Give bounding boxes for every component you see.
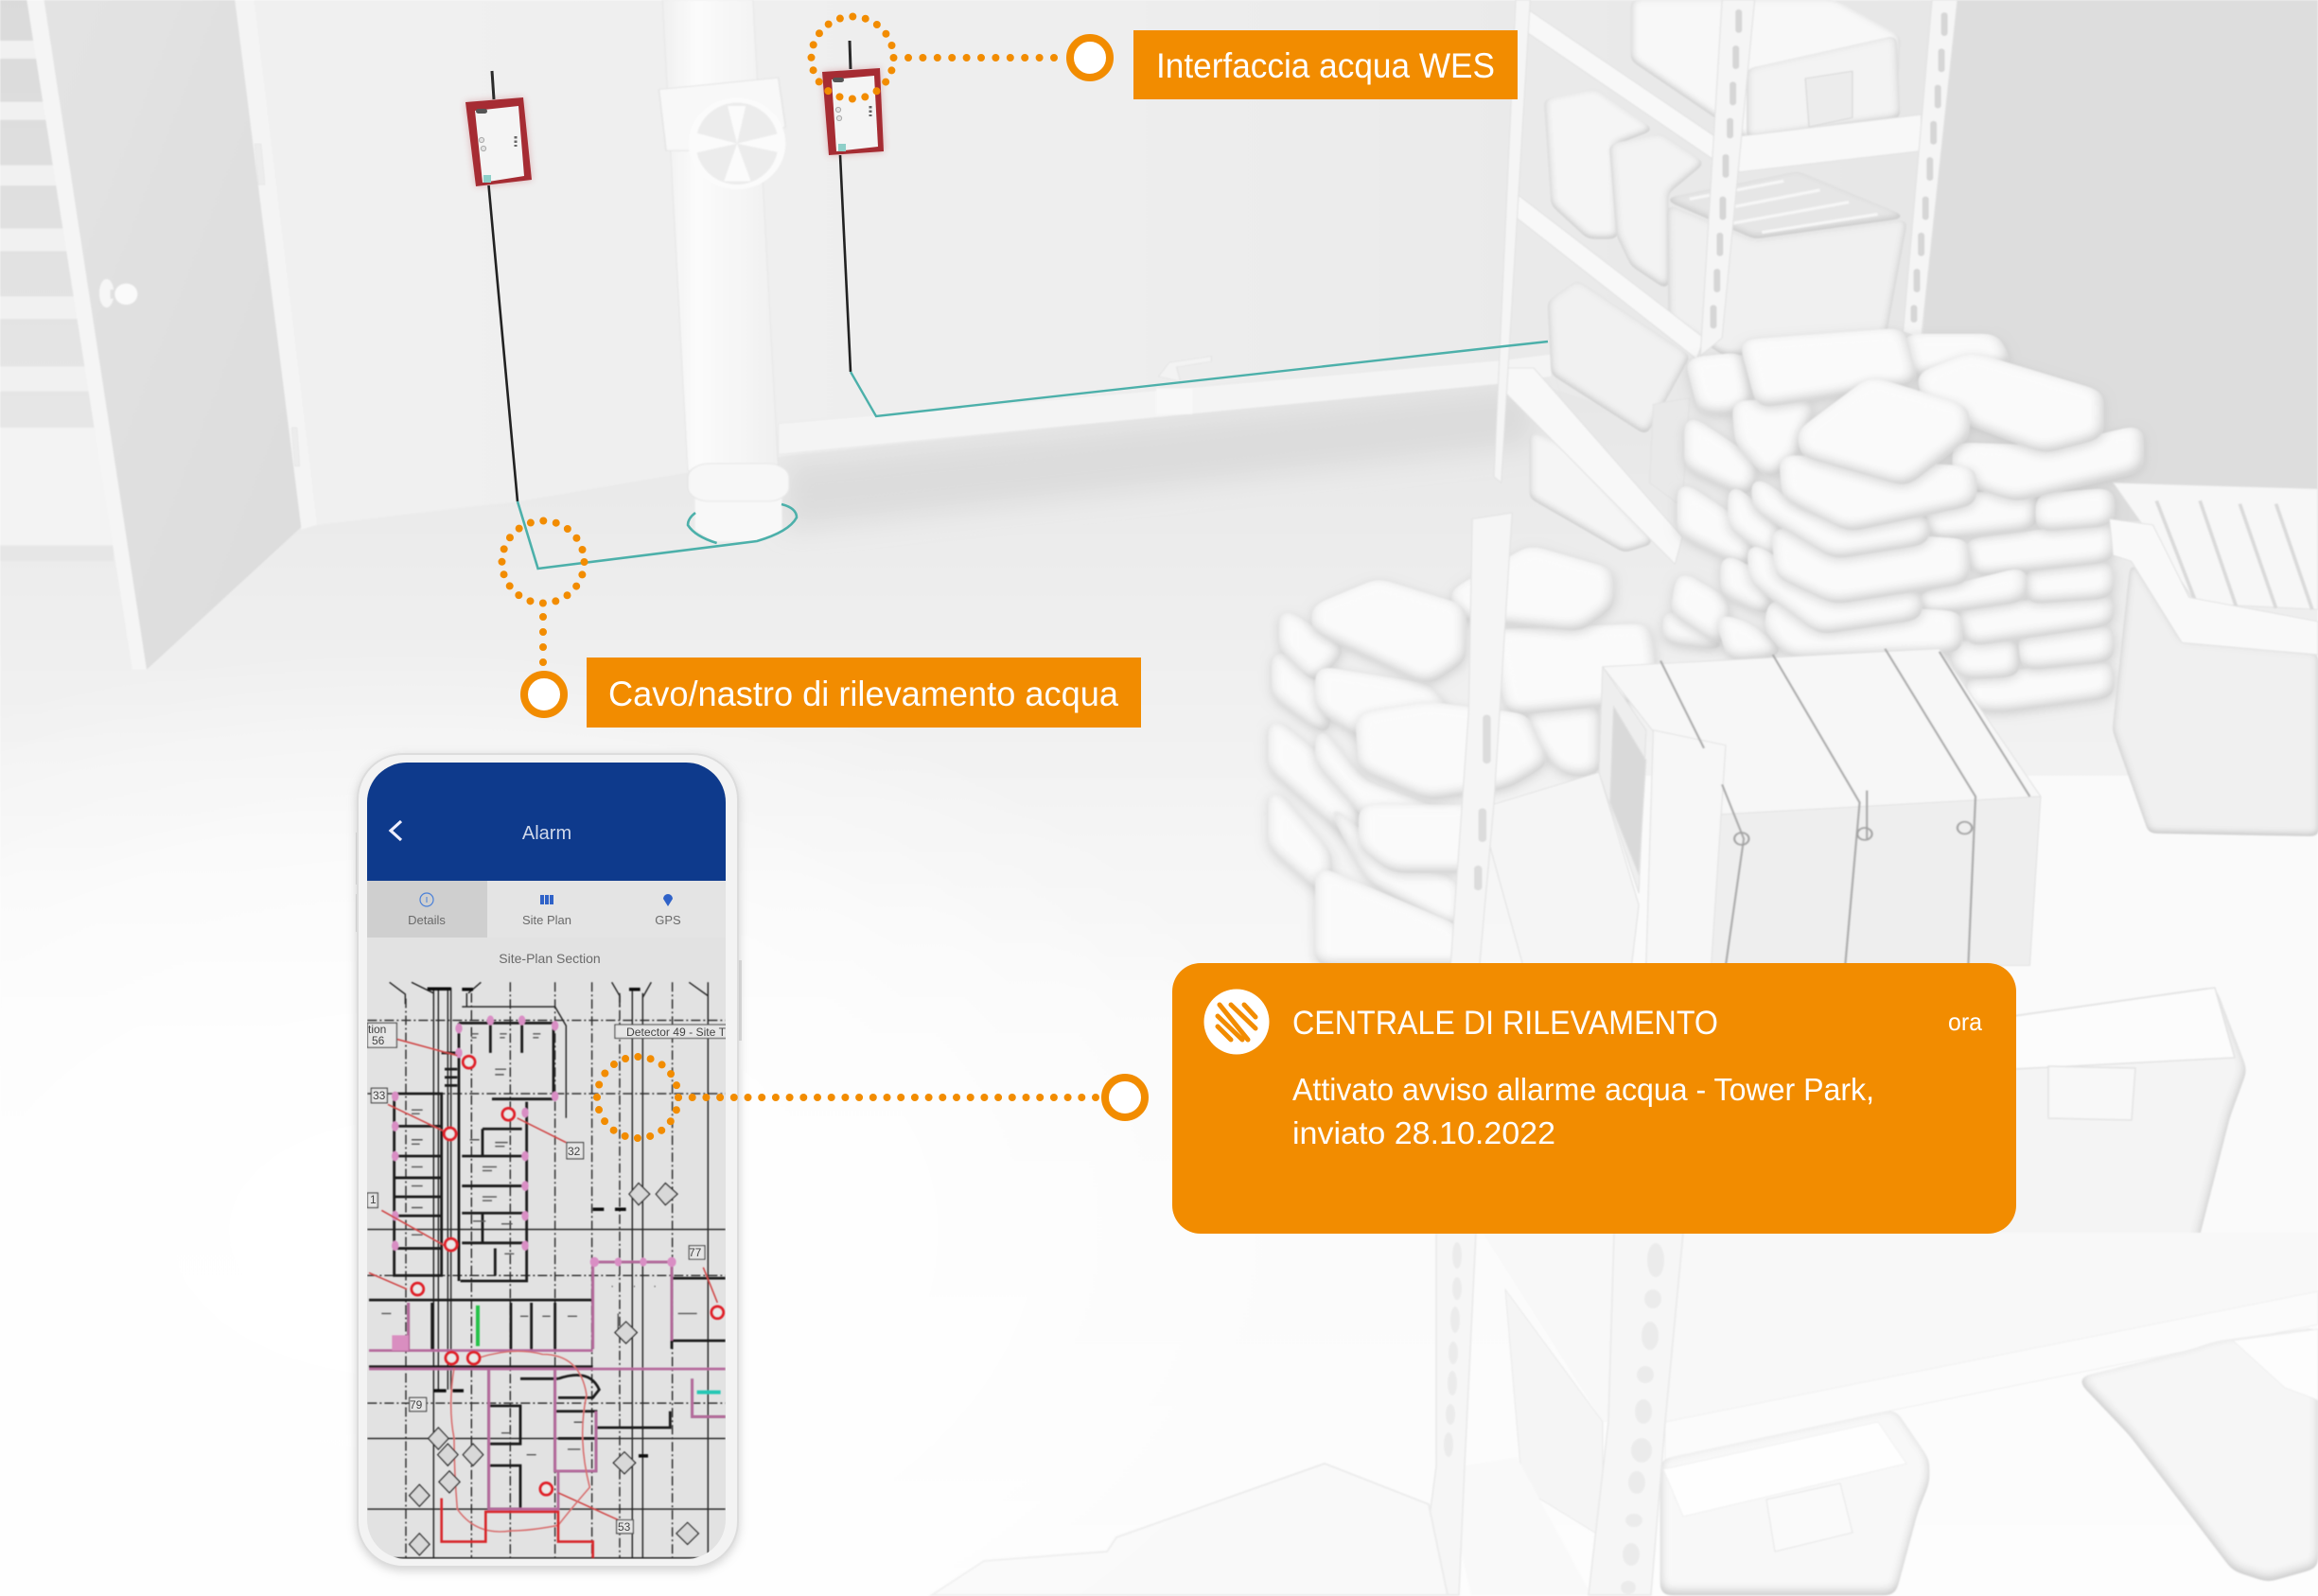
dotted connector (678, 1094, 1103, 1101)
dotted ring around cable (501, 520, 585, 604)
red glow (465, 97, 532, 186)
right storage box (2110, 482, 2318, 835)
phone side buttons (356, 833, 742, 1041)
label (1133, 30, 1518, 99)
tab bar (367, 881, 681, 938)
lower left bin (1505, 1289, 1603, 1537)
plan labels: 77 (689, 1246, 702, 1259)
icon: detection logo (1203, 990, 1270, 1054)
label (587, 658, 1141, 728)
label text: Interfaccia acqua WES (1156, 46, 1495, 85)
callout: phone to notification (597, 1057, 1145, 1138)
plan labels: tion (368, 1023, 386, 1036)
floor plan (367, 982, 727, 1558)
lower centre box (1660, 1410, 1929, 1595)
dotted ring around device (812, 17, 893, 98)
tab bar: Details (408, 913, 446, 927)
plan labels: 79 (410, 1398, 423, 1412)
floor (0, 378, 2318, 1596)
open door (26, 0, 317, 670)
crate (1599, 649, 2041, 965)
lower shelving and boxes (1419, 988, 2318, 1595)
lower shelf posts (1419, 1233, 1683, 1595)
red glow (822, 68, 884, 155)
shelf surface behind crate (1476, 776, 2318, 1239)
notification message: inviato 28.10.2022 (1292, 1115, 1555, 1150)
right WES device with cable (822, 41, 1548, 416)
plan section markers (410, 1184, 698, 1555)
screen (367, 763, 727, 1559)
end marker (1105, 1078, 1145, 1117)
right shelving, sacks and crate (1270, 0, 2318, 965)
card background (1172, 963, 2016, 1234)
lower shelf surface (1483, 1233, 2318, 1422)
shelving boxes (1530, 0, 1906, 552)
lower shelf front edge (1665, 1291, 2318, 1464)
smartphone with alarm screen (356, 754, 742, 1567)
panel: notification card (1172, 963, 2016, 1234)
device body (465, 97, 532, 186)
alarm header bar (367, 763, 726, 881)
end marker (524, 675, 564, 714)
shelf posts (1494, 0, 1958, 482)
notification time: ora (1948, 1008, 1983, 1036)
alarm header bar: Alarm (522, 823, 571, 844)
notification message: Attivato avviso allarme acqua - Tower Park, (1292, 1072, 1874, 1107)
antenna (492, 71, 494, 99)
tab bar: GPS (655, 913, 681, 927)
phone body (358, 754, 738, 1567)
sensing cable (840, 155, 851, 372)
plan tag boxes (367, 1023, 727, 1534)
callout: Interfaccia acqua WES (812, 17, 1518, 99)
antenna (850, 41, 851, 69)
shelf post holes (1713, 12, 1944, 325)
device body (822, 68, 884, 155)
tab bar: Site Plan (522, 913, 571, 927)
dotted connector (908, 54, 1058, 61)
callout: Cavo/nastro di rilevamento acqua (501, 520, 1141, 728)
left sack pile (1270, 546, 1657, 965)
staircase (0, 0, 114, 561)
lower left shelf (1442, 1457, 1591, 1595)
room labels (381, 1034, 697, 1455)
column knobs (392, 1015, 676, 1267)
front shelf post (1450, 513, 1639, 965)
plan labels (368, 1023, 727, 1534)
plan labels: 33 (373, 1089, 386, 1102)
dotted ring on site plan (597, 1057, 678, 1138)
label text: Cavo/nastro di rilevamento acqua (608, 675, 1118, 713)
right sack pile (1664, 329, 2142, 712)
soft white floor glow (0, 643, 1353, 1596)
lower post holes (1444, 1242, 1664, 1594)
plan labels: 56 (372, 1034, 385, 1047)
right side wall (1906, 0, 2318, 530)
left WES device with cable (465, 71, 797, 569)
section heading: Site-Plan Section (499, 951, 601, 966)
shelf boards (1505, 6, 1922, 564)
bottom sack (932, 1464, 1448, 1595)
lower right box (2076, 1327, 2318, 1582)
plan labels: 32 (568, 1145, 581, 1158)
box behind notification (1909, 988, 2246, 1284)
end marker (1070, 38, 1110, 78)
plan labels: 1 (370, 1193, 377, 1206)
dotted connector (539, 617, 547, 664)
vertical pipe with valve (659, 0, 789, 541)
horizontal pipe (779, 354, 1552, 454)
door knob (99, 279, 138, 307)
back wall (0, 0, 2318, 662)
notification title: CENTRALE DI RILEVAMENTO (1292, 1005, 1718, 1042)
floor shadow under pipe (785, 388, 1533, 530)
alarm markers (412, 1056, 724, 1495)
sensing cable (488, 185, 518, 501)
plan labels: Detector 49 - Site T (626, 1026, 727, 1039)
plan labels: 53 (618, 1520, 631, 1534)
